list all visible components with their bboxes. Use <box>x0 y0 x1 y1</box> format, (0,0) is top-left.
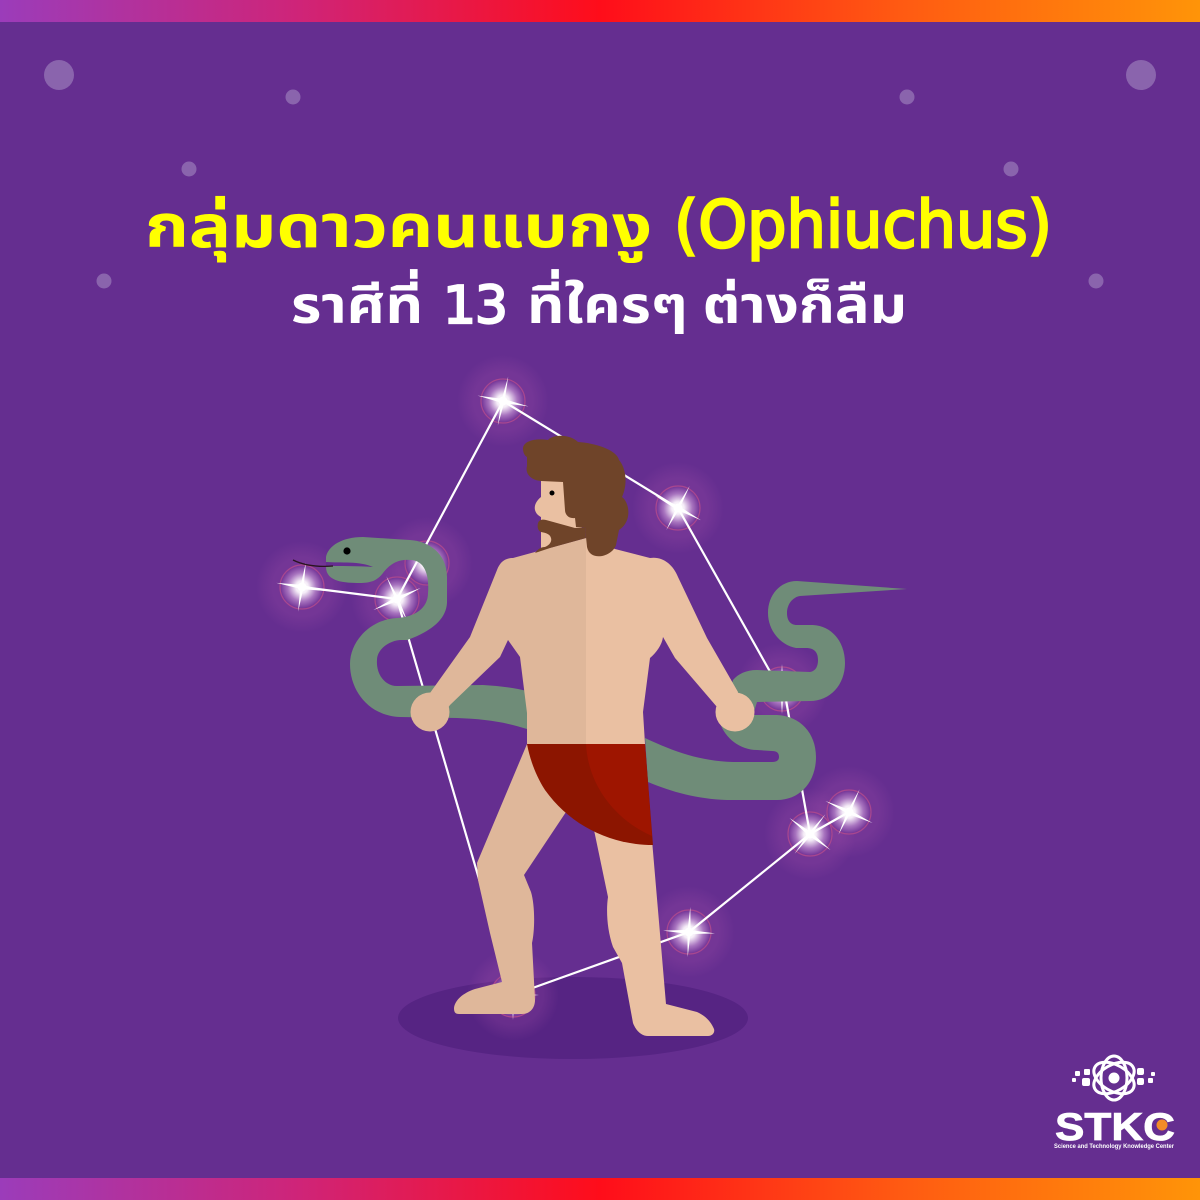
torso and arms, light half <box>586 538 738 744</box>
right hand <box>716 692 754 732</box>
snake tongue <box>293 560 333 566</box>
constellation star sparkles <box>272 371 883 1020</box>
constellation star discs <box>280 379 871 1017</box>
shorts, light cloth <box>586 744 652 836</box>
snake mouth <box>326 562 373 567</box>
title: กลุ่มดาวคนแบกงู <box>145 183 652 274</box>
logo orange dot <box>1156 1120 1168 1130</box>
subtitle: ที่ใครๆ ต่างก็ลืม <box>527 269 907 347</box>
logo side pixels <box>1072 1068 1155 1086</box>
STKC logo <box>1054 1056 1175 1150</box>
shorts, dark cloth <box>527 744 653 845</box>
snake: right part with tail <box>645 581 907 800</box>
logo atom icon <box>1088 1056 1140 1100</box>
decorative background dots <box>44 60 1156 288</box>
man figure <box>410 436 754 1036</box>
subtitle: 13 <box>443 276 508 336</box>
title: (Ophiuchus) <box>674 188 1052 263</box>
subtitle: ราศีที่ <box>291 269 423 347</box>
snake eye <box>343 547 351 555</box>
bottom gradient bar <box>0 1178 1200 1200</box>
right leg <box>594 830 714 1036</box>
logo wordmark: STKC <box>1055 1106 1175 1149</box>
eye <box>550 490 554 496</box>
left hand <box>410 692 450 732</box>
logo tagline: Science and Technology Knowledge Center <box>1054 1143 1174 1150</box>
left leg <box>454 744 566 1014</box>
face <box>535 478 585 548</box>
snake: left part with head <box>293 537 527 729</box>
hair <box>523 436 628 556</box>
constellation star glows <box>256 355 895 1041</box>
ground shadow <box>398 977 748 1059</box>
constellation lines <box>302 401 849 995</box>
subtitle <box>291 269 907 347</box>
top gradient bar <box>0 0 1200 22</box>
beard <box>535 520 586 553</box>
title <box>145 183 1052 274</box>
torso and arms, shaded half <box>430 538 586 744</box>
